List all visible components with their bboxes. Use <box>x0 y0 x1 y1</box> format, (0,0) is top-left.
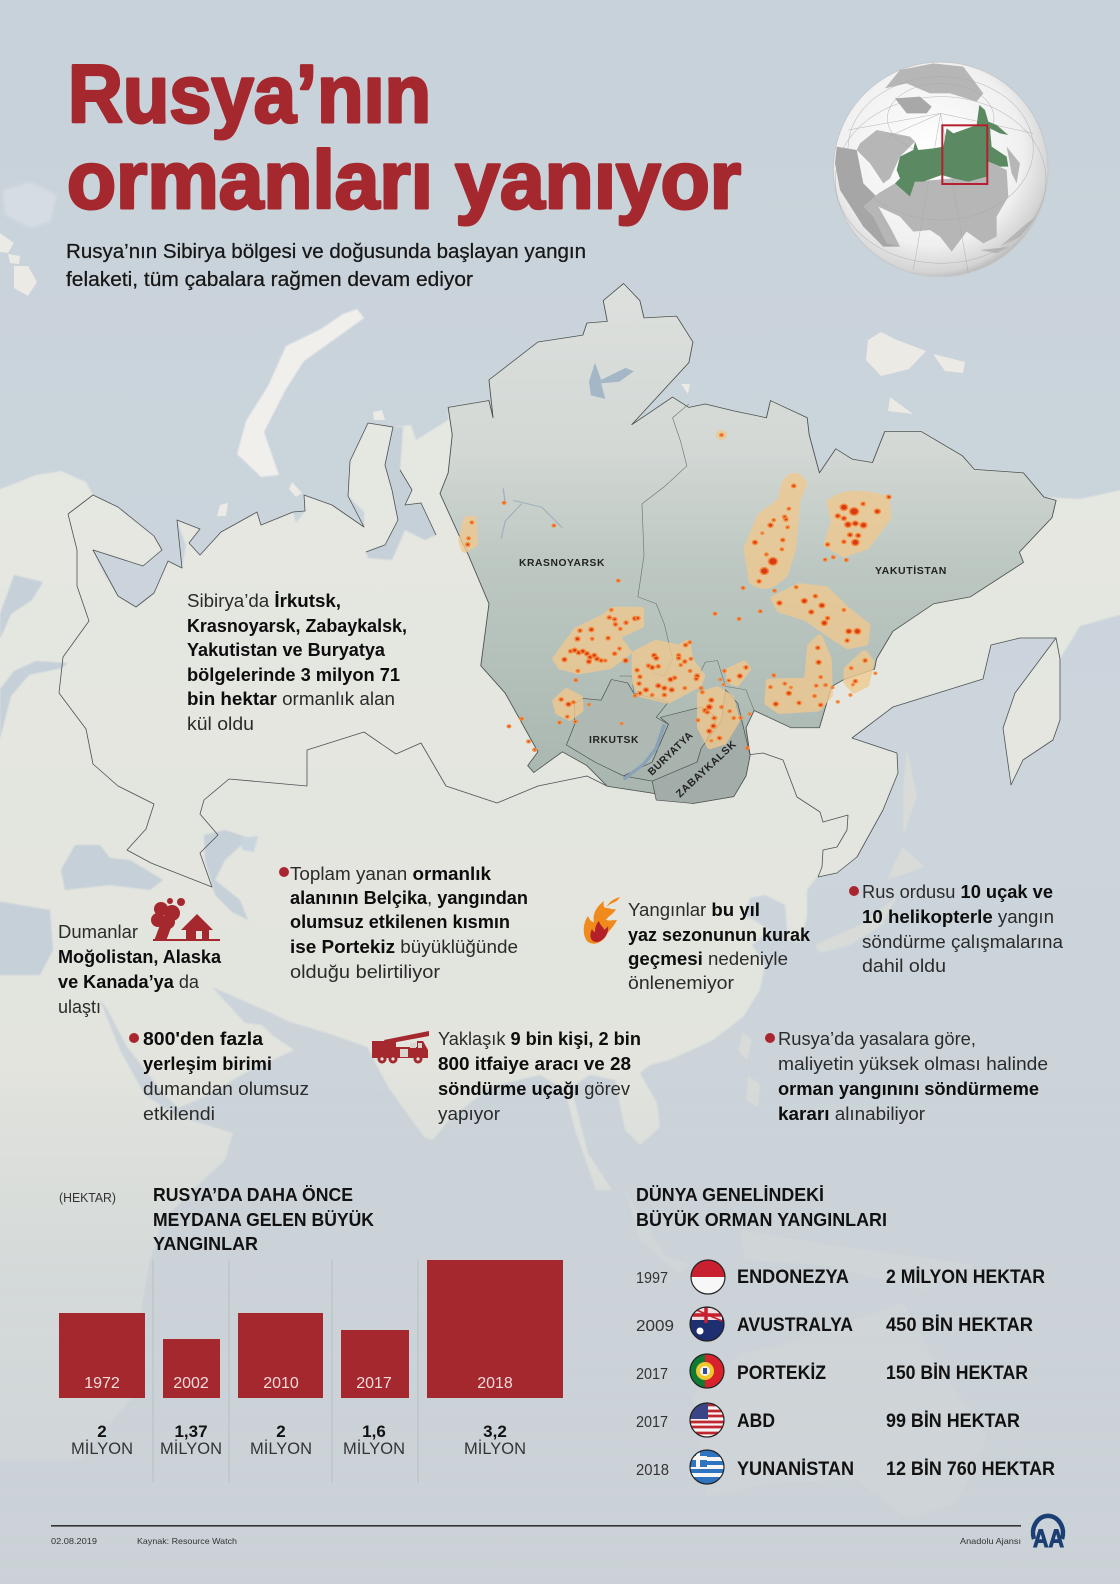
text block: crews: yapıyor <box>438 1104 500 1124</box>
title: Rusya’nın <box>68 49 431 140</box>
text block: burned area <box>187 591 407 734</box>
row: Portugal: PORTEKİZ <box>737 1363 826 1384</box>
bullet text: Belgium and Portugal comparison: alanının Belçika, yangından <box>290 888 528 908</box>
text block: drought: geçmesi nedeniyle <box>628 949 788 969</box>
islands <box>0 182 965 516</box>
internal borders and water <box>620 404 754 710</box>
row: Portugal <box>636 1353 1028 1389</box>
row: Indonesia <box>636 1259 1045 1295</box>
bullet text: army: dahil oldu <box>862 956 946 976</box>
lower fade over the map <box>0 1070 1120 1584</box>
text block: drought: Yangınlar bu yıl <box>628 900 760 920</box>
text block: crews <box>438 1029 641 1124</box>
row: Australia <box>636 1306 1033 1342</box>
bar 1972 <box>59 1313 145 1458</box>
Russia on the globe <box>895 105 1008 197</box>
bullet text: Belgium and Portugal comparison: olduğu belirtiliyor <box>290 962 440 982</box>
subtitle: felaketi, tüm çabalara rağmen devam ediyor <box>66 269 473 291</box>
text block: burned area: Sibirya’da İrkutsk, <box>187 591 341 611</box>
bar 1972: MİLYON <box>71 1439 133 1458</box>
fire zones <box>462 433 888 746</box>
row: Portugal: 150 BİN HEKTAR <box>886 1363 1028 1384</box>
text block: drought: önlenemiyor <box>628 973 734 993</box>
bullet text: army: Rus ordusu 10 uçak ve <box>862 882 1053 902</box>
Russia outline and neighbouring borders <box>59 423 1060 887</box>
footer: Anadolu Ajansı <box>960 1536 1021 1546</box>
region labels: IRKUTSK <box>589 734 639 746</box>
unit label: (HEKTAR) <box>59 1191 116 1205</box>
subregions: Irkutsk, Buryatia, Zabaykalsk <box>566 680 750 803</box>
bar 1972: 1972 <box>84 1375 120 1392</box>
footer <box>51 1516 1064 1553</box>
footer: 02.08.2019 <box>51 1536 97 1546</box>
row: Indonesia: ENDONEZYA <box>737 1267 849 1288</box>
bullet text: Belgium and Portugal comparison: olumsuz etkilenen kısmın <box>290 912 510 932</box>
text block: smoke: Dumanlar <box>58 922 138 942</box>
row: Australia: 2009 <box>636 1318 674 1335</box>
heading: world fires: DÜNYA GENELİNDEKİ <box>636 1185 824 1205</box>
bar 2002 <box>160 1339 222 1458</box>
heading: world fires: BÜYÜK ORMAN YANGINLARI <box>636 1210 887 1230</box>
icon: smoke over house <box>151 898 220 941</box>
bar 2010: 2010 <box>263 1375 299 1392</box>
subtitle <box>66 241 586 291</box>
bar 2017: MİLYON <box>343 1439 405 1458</box>
bullet text: settlements: yerleşim birimi <box>143 1054 272 1074</box>
bullet text: law: maliyetin yüksek olması halinde <box>778 1054 1048 1074</box>
bar 2018: MİLYON <box>464 1439 526 1458</box>
footer: Kaynak: Resource Watch <box>137 1536 237 1546</box>
bar 2010 <box>238 1313 323 1458</box>
text block: smoke: Moğolistan, Alaska <box>58 947 222 967</box>
bar 2017 <box>341 1330 409 1458</box>
bullet text: army <box>849 882 1064 976</box>
far east islands and south-east land <box>625 747 987 1520</box>
row: Indonesia: 2 MİLYON HEKTAR <box>886 1267 1045 1288</box>
icon: flame <box>584 897 620 944</box>
region labels: KRASNOYARSK <box>519 557 605 569</box>
row: USA: ABD <box>737 1411 775 1432</box>
land: Eurasia and Africa <box>0 283 1120 1460</box>
region labels: BURYATYA <box>646 729 696 778</box>
row: Greece: YUNANİSTAN <box>737 1459 854 1480</box>
region labels <box>519 557 947 800</box>
row: Australia: 450 BİN HEKTAR <box>886 1315 1033 1336</box>
locator globe <box>833 62 1048 277</box>
bar 2018 <box>427 1260 563 1458</box>
row: Greece: 12 BİN 760 HEKTAR <box>886 1459 1055 1480</box>
fire hotspots <box>466 434 891 751</box>
region labels: YAKUTİSTAN <box>875 564 947 577</box>
row: Australia: AVUSTRALYA <box>737 1315 853 1336</box>
text block: smoke <box>58 922 222 1017</box>
bullet text: law: orman yangınını söndürmeme <box>778 1079 1039 1099</box>
text block: burned area: kül oldu <box>187 714 254 734</box>
bar 2018: 2018 <box>477 1375 513 1392</box>
region labels: ZABAYKALSK <box>674 738 739 800</box>
text block: smoke: ve Kanada’ya da <box>58 972 200 992</box>
bullet text: army: 10 helikopterle yangın <box>862 907 1054 927</box>
bullet text: settlements: dumandan olumsuz <box>143 1079 309 1099</box>
text block: burned area: Yakutistan ve Buryatya <box>187 640 386 660</box>
text block: crews: söndürme uçağı görev <box>438 1079 630 1099</box>
bar 2010: MİLYON <box>250 1439 312 1458</box>
row: Greece <box>636 1449 1055 1485</box>
title: ormanları yanıyor <box>67 135 741 226</box>
bar 2018: 3,2 <box>483 1422 507 1441</box>
heading: past fires chart: RUSYA’DA DAHA ÖNCE <box>153 1185 353 1205</box>
bar 2017: 2017 <box>356 1375 392 1392</box>
row: Indonesia: 1997 <box>636 1270 668 1287</box>
bullet text: Belgium and Portugal comparison: Toplam yanan ormanlık <box>290 864 492 884</box>
logo: Anadolu Ajansı <box>1033 1516 1064 1553</box>
Siberia region drawn in zoom coordinates <box>440 283 1056 803</box>
globe graticule <box>835 77 1046 273</box>
bar chart: past fires <box>59 1260 563 1483</box>
bullet text: Belgium and Portugal comparison: ise Portekiz büyüklüğünde <box>290 937 518 957</box>
bullet text: settlements: 800'den fazla <box>143 1029 264 1049</box>
icon: fire truck <box>372 1031 429 1064</box>
row: USA: 99 BİN HEKTAR <box>886 1411 1020 1432</box>
globe land masses <box>835 63 1037 253</box>
text block: smoke: ulaştı <box>58 997 101 1017</box>
row: Greece: 2018 <box>636 1462 669 1479</box>
row: USA: 2017 <box>636 1414 668 1431</box>
bar 2017: 1,6 <box>362 1422 386 1441</box>
bullet text: law: Rusya’da yasalara göre, <box>778 1029 976 1049</box>
heading: past fires chart: MEYDANA GELEN BÜYÜK <box>153 1210 374 1230</box>
inland and marginal seas <box>0 427 474 975</box>
bullet text: law: kararı alınabiliyor <box>778 1104 925 1124</box>
text block: crews: Yaklaşık 9 bin kişi, 2 bin <box>438 1029 641 1049</box>
heading: past fires chart: YANGINLAR <box>153 1234 258 1254</box>
text block: crews: 800 itfaiye aracı ve 28 <box>438 1054 631 1074</box>
subtitle: Rusya’nın Sibirya bölgesi ve doğusunda başlayan yangın <box>66 241 586 263</box>
text block: burned area: bin hektar ormanlık alan <box>187 689 395 709</box>
bullet text: settlements <box>129 1029 309 1124</box>
text block: burned area: Krasnoyarsk, Zabaykalsk, <box>187 616 407 636</box>
title <box>67 49 741 226</box>
bullet text: Belgium and Portugal comparison <box>279 864 528 982</box>
bullet text: law <box>765 1029 1048 1124</box>
row: USA <box>636 1402 1020 1438</box>
text block: drought <box>628 900 811 993</box>
bar 2002: 2002 <box>173 1375 209 1392</box>
text block: drought: yaz sezonunun kurak <box>628 925 811 945</box>
row: Portugal: 2017 <box>636 1366 668 1383</box>
logo: Anadolu Ajansı: AA <box>1033 1525 1064 1553</box>
table: world fires <box>636 1259 1055 1485</box>
region: Siberian federal districts <box>440 283 1056 803</box>
bar 1972: 2 <box>97 1422 107 1441</box>
text block: burned area: bölgelerinde 3 milyon 71 <box>187 665 400 685</box>
bullet text: settlements: etkilendi <box>143 1104 215 1124</box>
heading: past fires chart <box>153 1185 374 1254</box>
bar 2010: 2 <box>276 1422 286 1441</box>
bar 2002: 1,37 <box>174 1422 208 1441</box>
red frame for map area <box>942 125 987 184</box>
bullet text: army: söndürme çalışmalarına <box>862 932 1064 952</box>
bar 2002: MİLYON <box>160 1439 222 1458</box>
heading: world fires <box>636 1185 887 1230</box>
